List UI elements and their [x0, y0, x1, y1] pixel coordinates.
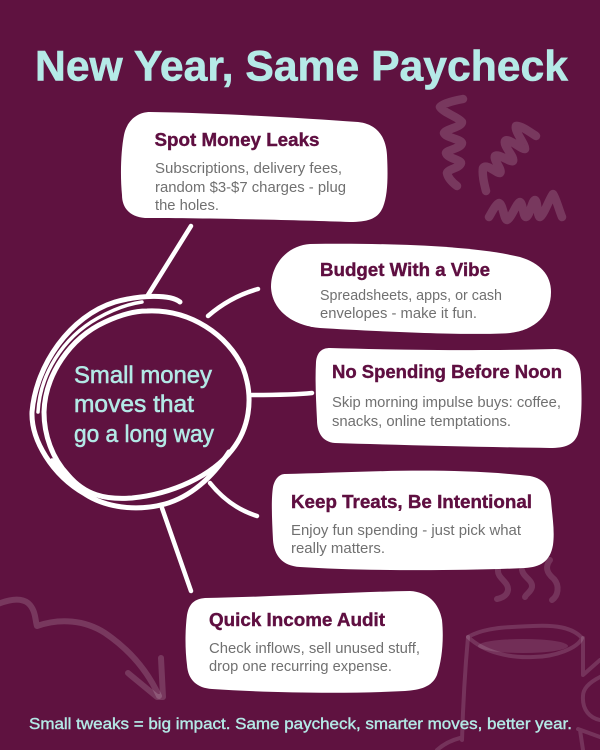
panel: quick income audit: Quick Income Audit [209, 609, 385, 630]
panel: no spending before noon: snacks, online temptations. [332, 414, 511, 430]
decoration: coffee mug with steam [437, 560, 600, 750]
panel: keep treats, be intentional: really matters. [291, 541, 385, 557]
central text: Small money [74, 362, 212, 389]
panel: quick income audit: drop one recurring expense. [209, 659, 392, 675]
panel: budget with a vibe: envelopes - make it fun. [320, 306, 477, 322]
panel: spot money leaks: random $3-$7 charges - plug [155, 180, 346, 196]
decoration: squiggles top right [440, 99, 562, 220]
panel: no spending before noon [316, 348, 582, 448]
panel: quick income audit: Check inflows, sell unused stuff, [209, 641, 420, 657]
panel: budget with a vibe [271, 244, 551, 334]
footer tagline: Small tweaks = big impact. Same paycheck, smarter moves, better year. [29, 716, 572, 733]
panel: no spending before noon: No Spending Before Noon [332, 361, 562, 382]
panel: keep treats, be intentional: Enjoy fun spending - just pick what [291, 523, 521, 539]
decoration: curved arrow bottom left [0, 600, 163, 697]
panel: quick income audit [186, 591, 443, 693]
connector lines [148, 226, 312, 591]
central text [74, 362, 214, 448]
panel: no spending before noon: Skip morning impulse buys: coffee, [332, 395, 561, 411]
central text: go a long way [74, 421, 214, 448]
title: New Year, Same Paycheck [35, 42, 568, 90]
panel: spot money leaks [121, 112, 388, 222]
panel: spot money leaks: the holes. [155, 198, 219, 214]
panel: spot money leaks: Subscriptions, delivery fees, [155, 161, 342, 177]
panel: spot money leaks: Spot Money Leaks [154, 129, 320, 150]
central scribbled circle [32, 296, 249, 508]
central text: moves that [74, 391, 194, 418]
panel: keep treats, be intentional [272, 471, 554, 570]
panel: keep treats, be intentional: Keep Treats, Be Intentional [291, 491, 532, 512]
panel: budget with a vibe: Budget With a Vibe [320, 259, 490, 280]
panel: budget with a vibe: Spreadsheets, apps, or cash [320, 288, 502, 304]
